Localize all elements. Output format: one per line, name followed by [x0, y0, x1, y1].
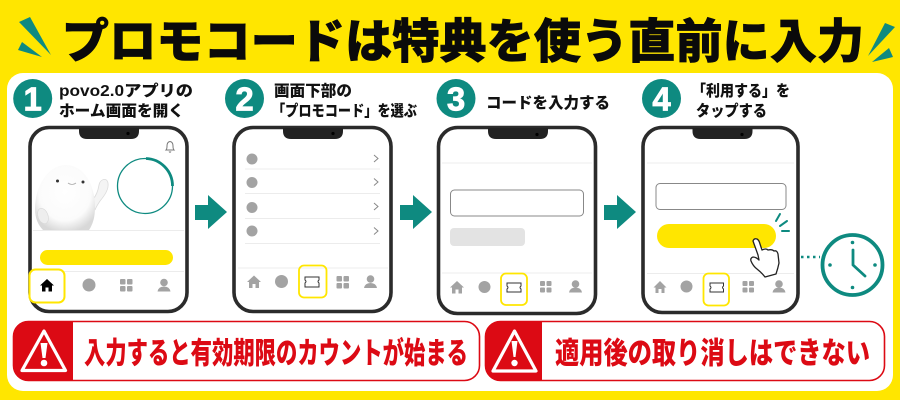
icon: tap rays	[776, 214, 789, 231]
step 2 heading: 画面下部の	[274, 81, 352, 100]
phone 2: menu screen	[234, 128, 391, 312]
phone 3: code entry screen	[438, 128, 596, 314]
phone 4 notch	[692, 128, 752, 139]
panel: white content area	[7, 73, 893, 391]
icon: left accent burst	[18, 17, 51, 57]
phone 1: home screen	[30, 128, 187, 312]
yellow apply button	[657, 224, 776, 248]
phone 2 notch	[283, 128, 343, 139]
step 1 badge: 1	[24, 80, 42, 118]
icon: warning triangle	[22, 331, 66, 370]
step 4 heading	[692, 81, 790, 120]
step 1 heading: ホーム画面を開く	[59, 102, 184, 120]
step 2 heading: 「プロモコード」を選ぶ	[272, 101, 417, 120]
phone 4: apply screen	[643, 128, 798, 312]
nav icons	[247, 275, 377, 288]
yellow action bar	[40, 250, 173, 265]
step 1 heading: povo2.0アプリの	[59, 81, 193, 100]
icon: circle	[82, 278, 96, 292]
progress ring	[118, 158, 173, 214]
step 3 badge: 3	[447, 80, 465, 118]
step 4 heading: 「利用する」を	[692, 81, 790, 100]
nav highlight: promo code ticket	[299, 266, 326, 298]
icon: bell	[166, 142, 174, 152]
icon: warning triangle	[493, 331, 536, 371]
nav icons	[450, 280, 582, 294]
mascot character	[35, 165, 108, 230]
phone 1 notch	[79, 128, 139, 139]
icon: tapping hand	[751, 239, 779, 277]
phone 3 notch	[488, 128, 548, 139]
step 2 badge: 2	[235, 80, 254, 118]
step 1 heading	[59, 81, 193, 120]
step 3 badge	[436, 79, 476, 118]
dotted connector	[801, 256, 820, 258]
step 3 heading: コードを入力する	[486, 94, 610, 112]
step 2 heading	[272, 81, 417, 120]
step 4 badge: 4	[652, 80, 671, 118]
icon: home black	[40, 279, 54, 292]
icon: grid	[120, 279, 132, 292]
nav icons	[654, 280, 786, 293]
arrow 1	[195, 195, 227, 229]
warning banner 2	[485, 321, 884, 381]
step 4 heading: タップする	[696, 101, 767, 120]
title: プロモコードは特典を使う直前に入力	[62, 15, 864, 68]
icon: clock	[822, 235, 882, 295]
list rows	[245, 154, 380, 244]
nav highlight: promo code ticket	[501, 274, 527, 305]
nav highlight: promo code ticket	[704, 274, 729, 306]
step 4 badge	[642, 79, 681, 118]
icon: right accent burst	[868, 23, 895, 62]
arrow 3	[604, 195, 636, 229]
icon: user	[158, 279, 170, 292]
code input box	[450, 190, 584, 216]
code input box	[656, 184, 786, 210]
step 1 badge	[13, 79, 52, 118]
warning banner 1	[13, 321, 480, 381]
step 2 badge	[225, 79, 264, 118]
disabled button	[450, 228, 525, 246]
nav highlight: home	[30, 270, 64, 302]
arrow 2	[400, 195, 432, 229]
warning text 1: 入力すると有効期限のカウントが始まる	[84, 336, 468, 370]
